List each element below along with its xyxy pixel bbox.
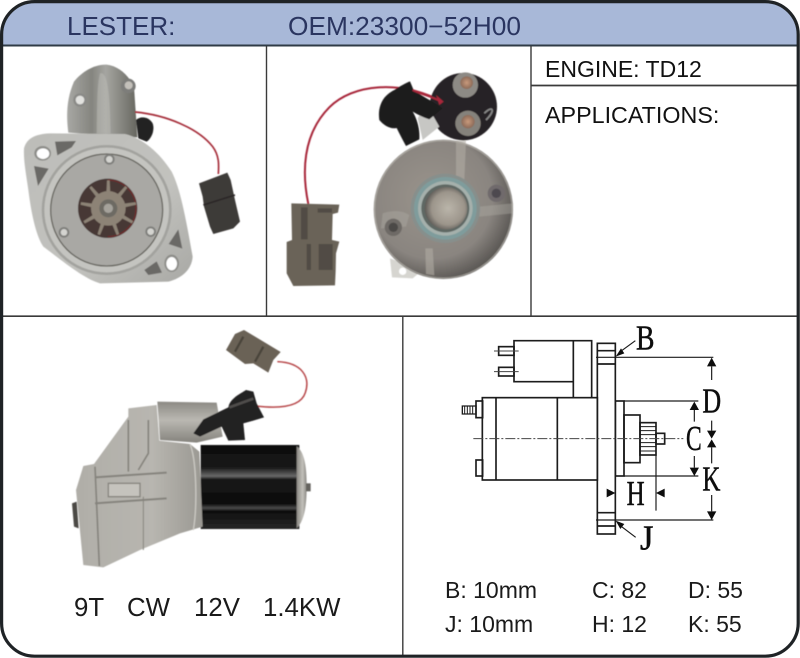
terminal centre lines (494, 351, 519, 372)
solenoid cap (67, 65, 137, 137)
solenoid outline (499, 341, 592, 397)
header band (0, 2, 798, 46)
dimension drawing (462, 318, 721, 557)
connector (199, 173, 240, 234)
letter B: B (636, 318, 654, 357)
photo: starter rear view (287, 72, 513, 286)
pinion end (72, 502, 79, 528)
dimension arrows (607, 348, 716, 529)
plate screws (59, 154, 156, 238)
drive housing (76, 405, 203, 567)
letter J: J (640, 519, 653, 557)
rubber boot (193, 390, 264, 441)
engine label: ENGINE: TD12 (545, 56, 702, 82)
solenoid body (157, 402, 223, 443)
motor end housing (374, 140, 513, 279)
pinion gear (80, 180, 136, 236)
letter H: H (627, 474, 645, 513)
dimension values: K: 55 (688, 611, 742, 637)
dimension values: H: 12 (592, 611, 647, 637)
letter C: C (686, 421, 702, 458)
dimension values: J: 10mm (445, 611, 533, 637)
pinion recess (78, 179, 137, 238)
solenoid terminals (453, 72, 481, 136)
grey connector (287, 203, 339, 286)
drive nose and pinion (615, 401, 665, 476)
specification strip: 1.4KW (263, 594, 341, 622)
extension lines (596, 357, 713, 520)
dimension values: C: 82 (592, 577, 647, 603)
dimension stems (622, 341, 712, 537)
connector (226, 330, 281, 373)
black motor (201, 445, 299, 529)
specification strip (74, 594, 341, 622)
housing ribs (95, 420, 196, 566)
red wire (305, 87, 443, 204)
solenoid (430, 73, 497, 140)
motor outline (462, 398, 597, 480)
specification strip: 9T (74, 594, 104, 622)
applications label: APPLICATIONS: (545, 102, 719, 128)
brand label: LESTER: (67, 11, 175, 41)
mounting tab (390, 258, 423, 278)
photo: starter front view (24, 65, 240, 283)
rubber boot (379, 81, 443, 146)
mounting flange (597, 343, 615, 534)
front plate rings (42, 145, 172, 275)
mounting flange (24, 133, 193, 283)
end cap (297, 446, 307, 528)
OEM number: OEM:23300−52H00 (288, 13, 521, 41)
flange openings (34, 146, 51, 161)
letter K: K (702, 460, 721, 499)
red wire (256, 362, 307, 407)
letter D: D (702, 382, 721, 421)
dimension values: D: 55 (688, 577, 743, 603)
specification strip: 12V (194, 594, 241, 622)
dimension values (445, 577, 743, 637)
housing bolts (385, 185, 505, 236)
centre line (473, 437, 683, 440)
dimension values: B: 10mm (445, 577, 537, 603)
photo: starter side view (72, 330, 311, 567)
rubber plug (136, 117, 153, 142)
bearing boss (411, 174, 480, 243)
specification strip: CW (127, 594, 171, 622)
red wire (135, 112, 219, 174)
